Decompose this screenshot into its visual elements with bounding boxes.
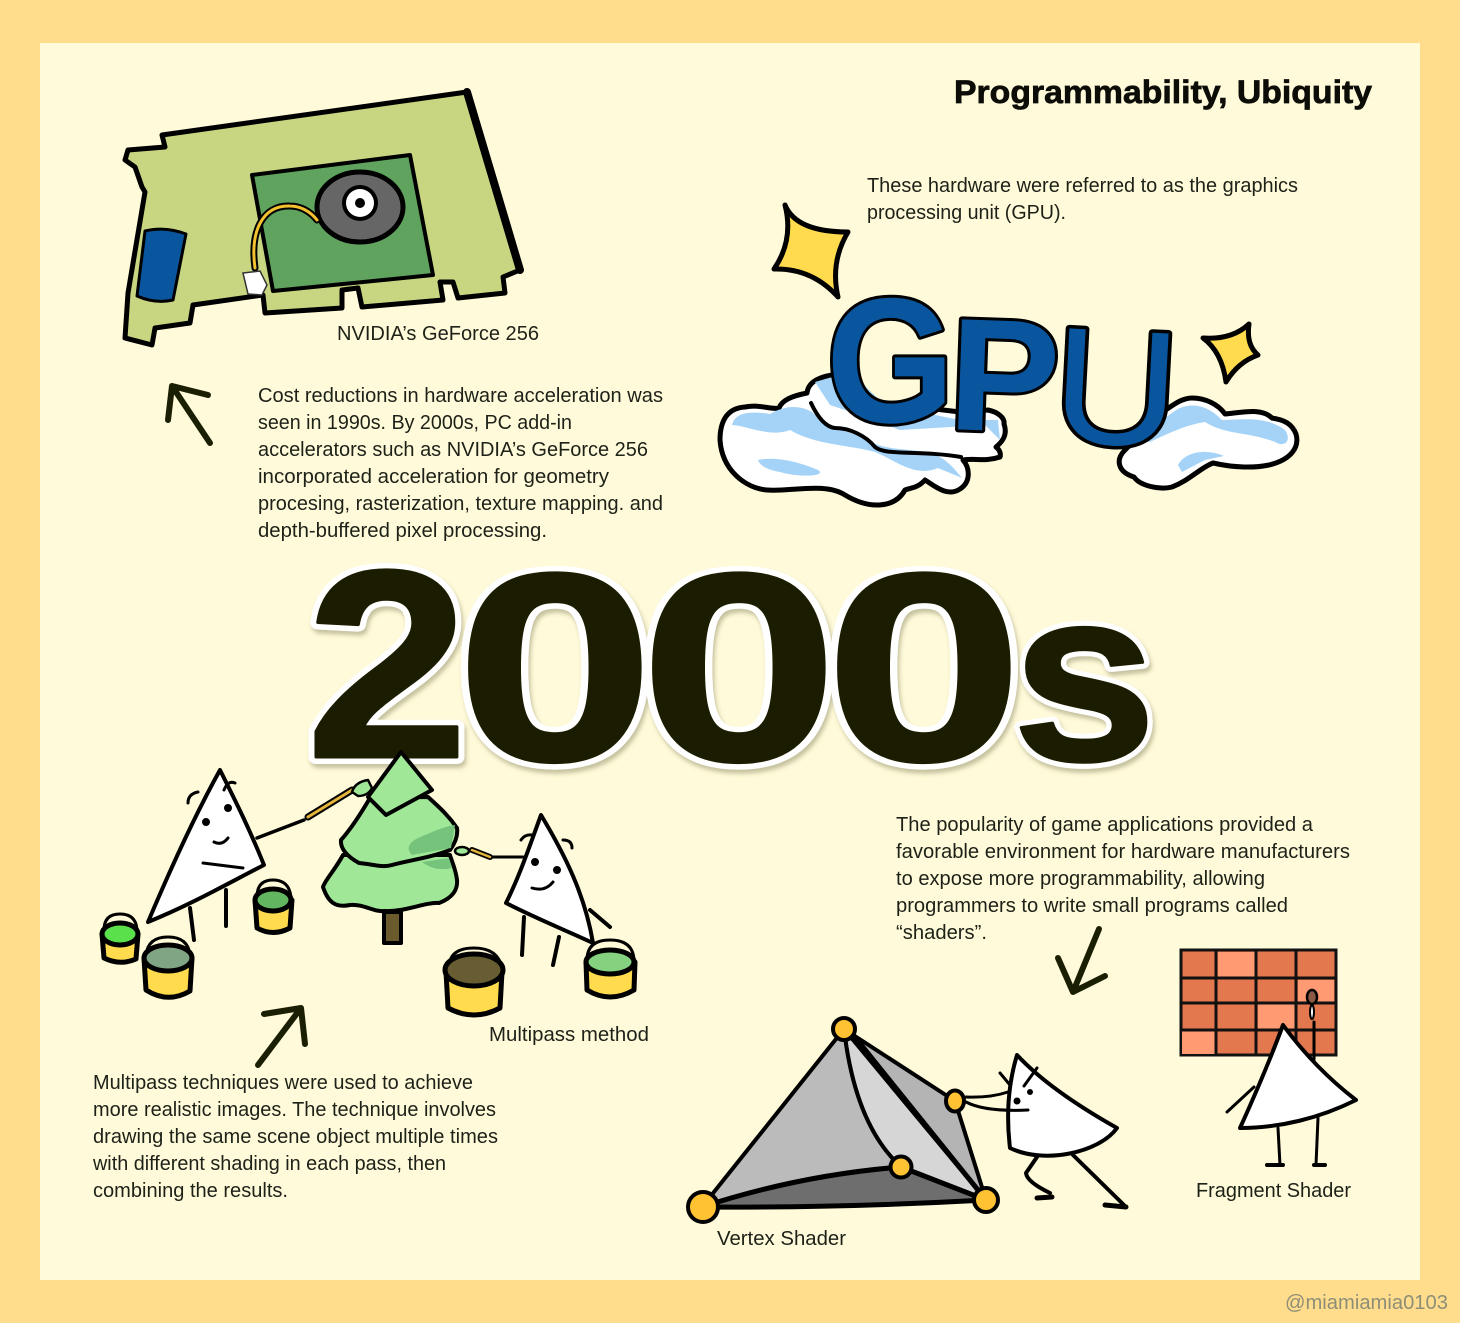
- heading: 2000s: 2: [306, 515, 468, 814]
- heading: 2000s: s: [1012, 537, 1157, 813]
- pushing character: [966, 1055, 1126, 1207]
- icon: large sparkle: [774, 205, 848, 297]
- title: Programmability, Ubiquity: [954, 74, 1372, 110]
- illustration: vertex shader pyramid with character: [688, 1018, 1126, 1222]
- text block: shaders: favorable environment for hardware manufacturers: [896, 841, 1350, 863]
- label: Multipass method: Multipass method: [489, 1024, 649, 1046]
- heading: 2000s: 0: [456, 518, 654, 817]
- heading: 2000s: 0: [456, 518, 654, 817]
- text block: multipass: with different shading in each pass, then: [92, 1153, 446, 1175]
- arrow: to graphics card: [168, 386, 210, 443]
- tree: [323, 752, 457, 943]
- painting character: [1227, 990, 1356, 1165]
- icon: small sparkle: [1203, 324, 1258, 382]
- illustration: GPU lettering on clouds: [720, 261, 1297, 505]
- text block: shaders: The popularity of game applications provided a: [896, 814, 1314, 836]
- illustration: multipass method painters and tree: [102, 752, 635, 1015]
- text block: cost reductions: Cost reductions in hardware acceleration was: [258, 385, 663, 407]
- label: Vertex Shader: Vertex Shader: [717, 1228, 846, 1250]
- text block: cost reductions: depth-buffered pixel processing.: [258, 520, 547, 542]
- heading: 2000s: 2: [306, 515, 468, 814]
- illustration: GPU lettering on clouds: U: [1048, 293, 1184, 483]
- illustration: fragment shader grid with character: [1181, 950, 1356, 1165]
- heading: 2000s: 0: [640, 518, 838, 817]
- text block: multipass: [92, 1072, 498, 1202]
- text block: cost reductions: incorporated acceleration for geometry: [258, 466, 609, 488]
- text block: GPU definition: processing unit (GPU).: [867, 202, 1066, 224]
- illustration: GeForce 256 graphics card: [125, 92, 520, 345]
- text block: shaders: programmers to write small programs called: [896, 895, 1288, 917]
- text block: multipass: combining the results.: [93, 1180, 288, 1202]
- text block: multipass: drawing the same scene object multiple times: [93, 1126, 498, 1148]
- heading: 2000s: [306, 515, 1157, 817]
- text block: cost reductions: [258, 385, 663, 542]
- credit: handle: @miamiamia0103: [1285, 1292, 1448, 1314]
- left character: [148, 770, 372, 940]
- text block: cost reductions: accelerators such as NVIDIA’s GeForce 256: [258, 439, 648, 461]
- label: NVIDIA's GeForce 256: NVIDIA’s GeForce 256: [337, 323, 539, 345]
- heading: 2000s: 0: [825, 518, 1023, 817]
- label: Fragment Shader: Fragment Shader: [1196, 1180, 1351, 1202]
- heading: 2000s: 0: [825, 518, 1023, 817]
- illustration: GPU lettering on clouds: G: [826, 261, 955, 460]
- arrow: to multipass illustration: [258, 1008, 305, 1065]
- text block: cost reductions: procesing, rasterization, texture mapping. and: [258, 493, 663, 515]
- arrow: to shader illustrations: [1058, 929, 1105, 992]
- text block: shaders: “shaders”.: [896, 922, 987, 944]
- heading: 2000s: 0: [640, 518, 838, 817]
- text block: GPU definition: These hardware were referred to as the graphics: [867, 175, 1298, 197]
- text block: GPU definition: [867, 175, 1298, 224]
- illustration: GPU lettering on clouds: P: [946, 284, 1063, 467]
- paint buckets: [102, 880, 635, 1015]
- text block: multipass: Multipass techniques were used to achieve: [93, 1072, 473, 1094]
- heading: 2000s: s: [1012, 537, 1157, 813]
- text block: cost reductions: seen in 1990s. By 2000s, PC add-in: [258, 412, 572, 434]
- text block: shaders: [896, 814, 1350, 944]
- text block: multipass: more realistic images. The technique involves: [93, 1099, 496, 1121]
- text block: shaders: to expose more programmability, allowing: [896, 868, 1265, 890]
- right character: [455, 815, 610, 965]
